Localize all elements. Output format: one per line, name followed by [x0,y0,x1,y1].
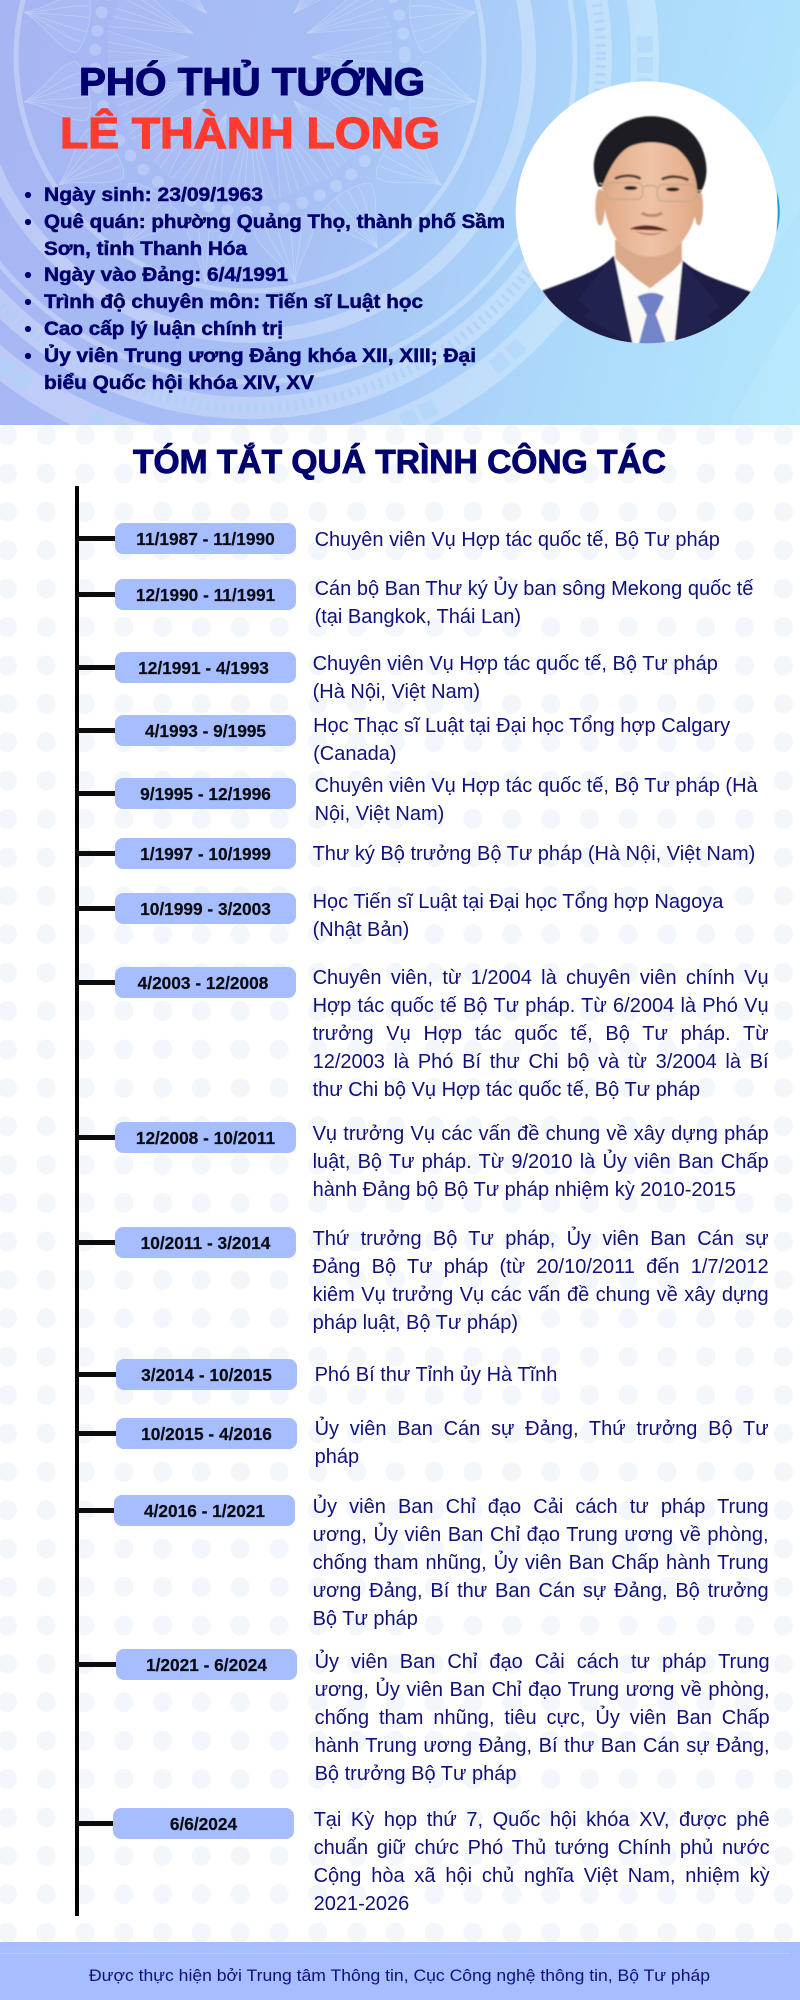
timeline entry 13: chống tham nhũng, Ủy viên Ban Chấp hành Trung [313,1552,769,1574]
title line: office: PHÓ THỦ TƯỚNG [79,60,425,104]
timeline entry 10: Đảng Bộ Tư pháp (từ 20/10/2011 đến 1/7/2012 [313,1256,769,1278]
timeline entry 1 [77,523,720,554]
biography list: Trình độ chuyên môn: Tiến sĩ Luật học [44,291,423,313]
timeline entry 4: 4/1993 - 9/1995 [145,721,266,741]
timeline entry 11: Phó Bí thư Tỉnh ủy Hà Tĩnh [315,1364,557,1386]
timeline entry 1: Chuyên viên Vụ Hợp tác quốc tế, Bộ Tư pháp [315,528,720,550]
timeline entry 5: Nội, Việt Nam) [315,802,444,824]
section heading: TÓM TẮT QUÁ TRÌNH CÔNG TÁC [133,442,666,480]
timeline entry 3 [77,652,718,702]
timeline entry 12 [77,1416,769,1468]
timeline entry 5: 9/1995 - 12/1996 [140,784,271,804]
timeline entry 12: 10/2015 - 4/2016 [141,1424,272,1444]
biography list: Ngày vào Đảng: 6/4/1991 [44,264,288,286]
biography list: Ủy viên Trung ương Đảng khóa XII, XIII; Đại [44,343,476,367]
timeline entry 8: Hợp tác quốc tế Bộ Tư pháp. Từ 6/2004 là Phó Vụ [313,994,769,1016]
timeline axis [75,486,79,1916]
soft diagonal bands on the right [661,44,800,470]
biography list [24,184,505,394]
timeline entry 13: 4/2016 - 1/2021 [144,1501,265,1521]
timeline entry 13: ương, Ủy viên Ban Chỉ đạo Trung ương về phòng, [313,1524,769,1546]
timeline entry 14: ương, Ủy viên Ban Chỉ đạo Trung ương về phòng, [315,1678,770,1700]
timeline entry 7: Học Tiến sĩ Luật tại Đại học Tổng hợp Nagoya [313,890,723,912]
timeline entry 9: hành Đảng bộ Bộ Tư pháp nhiệm kỳ 2010-2015 [313,1178,736,1200]
timeline entry 12: pháp [315,1446,359,1468]
title line: name: LÊ THÀNH LONG [60,108,440,158]
timeline entry 1: 11/1987 - 11/1990 [136,529,275,549]
decorative drum mandala [0,0,659,425]
header panel [0,0,800,425]
timeline entry 7: (Nhật Bản) [313,918,409,940]
timeline entry 8 [77,966,769,1100]
timeline entry 5 [77,774,758,824]
timeline entry 10: 10/2011 - 3/2014 [141,1233,270,1253]
footer bar [0,1942,800,2000]
timeline entry 13: ương Đảng, Bí thư Ban Cán sự Đảng, Bộ trưởng [313,1580,769,1602]
timeline entry 13: Bộ Tư pháp [313,1608,418,1630]
timeline entry 9 [77,1122,769,1200]
timeline entry 11 [77,1359,557,1390]
timeline entry 4 [77,714,730,764]
timeline entry 14: Ủy viên Ban Chỉ đạo Cải cách tư pháp Trung [315,1650,770,1672]
timeline entry 15: 6/6/2024 [170,1814,237,1834]
timeline entry 6: Thư ký Bộ trưởng Bộ Tư pháp (Hà Nội, Việt Nam) [313,842,755,864]
timeline entry 11: 3/2014 - 10/2015 [141,1365,272,1385]
timeline entry 8: thư Chi bộ Vụ Hợp tác quốc tế, Bộ Tư pháp [313,1078,700,1100]
timeline entry 13 [77,1494,769,1630]
timeline entry 7: 10/1999 - 3/2003 [140,899,271,919]
timeline entry 15: Cộng hòa xã hội chủ nghĩa Việt Nam, nhiệm kỳ [314,1864,770,1886]
timeline entry 2: Cán bộ Ban Thư ký Ủy ban sông Mekong quốc tế [315,578,753,600]
timeline entry 3: Chuyên viên Vụ Hợp tác quốc tế, Bộ Tư pháp [313,652,718,674]
timeline entry 10: kiêm Vụ trưởng Vụ các vấn đề chung về xây dựng [313,1284,769,1306]
timeline entry 12: Ủy viên Ban Cán sự Đảng, Thứ trưởng Bộ Tư [315,1418,769,1440]
timeline entry 10 [77,1226,769,1334]
timeline entry 13: Ủy viên Ban Chỉ đạo Cải cách tư pháp Trung [313,1496,769,1518]
timeline entry 15 [77,1808,770,1914]
footer credit: Được thực hiện bởi Trung tâm Thông tin, Cục Công nghệ thông tin, Bộ Tư pháp [89,1966,710,1985]
timeline entry 10: pháp luật, Bộ Tư pháp) [313,1312,518,1334]
timeline entry 9: 12/2008 - 10/2011 [136,1128,275,1148]
timeline entry 15: chuẩn giữ chức Phó Thủ tướng Chính phủ nước [314,1836,770,1858]
timeline entry 14: hành Trung ương Đảng, Bí thư Ban Cán sự Đảng, [315,1734,770,1756]
timeline entry 14 [77,1649,770,1784]
timeline entry 9: Vụ trưởng Vụ các vấn đề chung về xây dựng pháp [313,1122,769,1144]
timeline entry 5: Chuyên viên Vụ Hợp tác quốc tế, Bộ Tư pháp (Hà [315,774,758,796]
timeline entry 10: Thứ trưởng Bộ Tư pháp, Ủy viên Ban Cán sự [313,1228,769,1250]
timeline entry 8: trưởng Vụ Hợp tác quốc tế, Bộ Tư pháp. Từ [313,1022,769,1044]
title [60,60,440,158]
biography list: Quê quán: phường Quảng Thọ, thành phố Sầm [44,211,505,233]
timeline entry 8: Chuyên viên, từ 1/2004 là chuyên viên chính Vụ [313,966,769,988]
timeline entry 2: (tại Bangkok, Thái Lan) [315,606,521,628]
timeline entry 8: 4/2003 - 12/2008 [138,973,268,993]
biography list: Sơn, tỉnh Thanh Hóa [44,238,247,260]
timeline entry 2: 12/1990 - 11/1991 [136,585,275,605]
portrait photo [516,81,780,344]
timeline entry 6 [77,838,755,869]
timeline entry 8: 12/2003 là Phó Bí thư Chi bộ và từ 3/2004 là Bí [313,1050,769,1072]
timeline entry 2 [77,576,754,628]
timeline entry 14: chống tham nhũng, tiêu cực, Ủy viên Ban Chấp [315,1706,770,1728]
timeline entry 4: (Canada) [313,742,396,764]
timeline entry 15: Tại Kỳ họp thứ 7, Quốc hội khóa XV, được phê [314,1808,770,1830]
timeline entry 4: Học Thạc sĩ Luật tại Đại học Tổng hợp Calgary [313,714,730,736]
timeline entry 15: 2021-2026 [314,1892,409,1914]
biography list: Ngày sinh: 23/09/1963 [44,184,263,206]
timeline entry 3: 12/1991 - 4/1993 [138,658,269,678]
timeline entry 14: 1/2021 - 6/2024 [146,1655,267,1675]
timeline entry 9: luật, Bộ Tư pháp. Từ 9/2010 là Ủy viên Ban Chấp [313,1150,769,1172]
timeline entry 3: (Hà Nội, Việt Nam) [313,680,480,702]
biography list: Cao cấp lý luận chính trị [44,318,283,340]
timeline entry 7 [77,890,724,940]
timeline entry 14: Bộ trưởng Bộ Tư pháp [315,1762,516,1784]
timeline entry 6: 1/1997 - 10/1999 [140,844,271,864]
biography list: biểu Quốc hội khóa XIV, XV [44,372,314,394]
